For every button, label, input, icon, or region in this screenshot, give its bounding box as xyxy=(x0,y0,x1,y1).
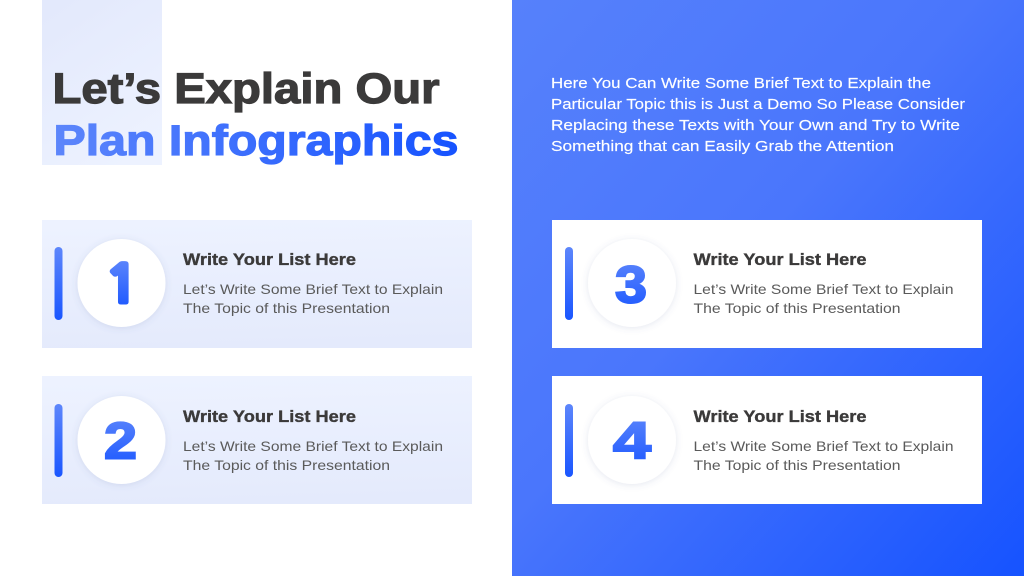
item 2 text: The Topic of this Presentation xyxy=(183,458,390,473)
number circle 1 xyxy=(78,239,166,327)
item 1 text: The Topic of this Presentation xyxy=(183,301,390,316)
panel: list item 4 xyxy=(552,376,982,504)
item 4 text xyxy=(694,439,954,473)
decorative title backdrop xyxy=(42,0,162,165)
number circle 2 xyxy=(78,396,166,484)
item 2 heading: Write Your List Here xyxy=(183,408,356,426)
item 3 text xyxy=(694,282,954,316)
accent bar 3 xyxy=(565,247,573,320)
accent bar 4 xyxy=(565,404,573,477)
number circle 2: 2 xyxy=(104,412,137,470)
item 1 text xyxy=(183,282,443,316)
item 3 text: Let’s Write Some Brief Text to Explain xyxy=(694,282,954,297)
intro paragraph: Here You Can Write Some Brief Text to Explain the xyxy=(551,76,931,92)
intro paragraph xyxy=(551,76,965,155)
item 2 text: Let’s Write Some Brief Text to Explain xyxy=(183,439,443,454)
number circle 4 xyxy=(588,396,676,484)
number circle 3 xyxy=(588,239,676,327)
intro paragraph: Replacing these Texts with Your Own and Try to Write xyxy=(551,118,960,134)
title xyxy=(52,66,458,165)
item 3 text: The Topic of this Presentation xyxy=(694,301,900,316)
panel: list item 3 xyxy=(552,220,982,348)
accent bar 1 xyxy=(54,247,62,320)
intro paragraph: Something that can Easily Grab the Attention xyxy=(551,139,894,155)
title: Let’s Explain Our xyxy=(52,66,440,113)
number circle 3: 3 xyxy=(615,256,647,314)
item 2 text xyxy=(183,439,443,473)
panel: list item 2 xyxy=(42,376,472,504)
item 4 text: The Topic of this Presentation xyxy=(694,458,900,473)
title: Plan Infographics xyxy=(54,118,458,165)
item 1 heading: Write Your List Here xyxy=(183,251,356,269)
intro paragraph: Particular Topic this is Just a Demo So Please Consider xyxy=(551,97,965,113)
number circle 4: 4 xyxy=(613,412,651,470)
item 4 text: Let’s Write Some Brief Text to Explain xyxy=(694,439,954,454)
accent bar 2 xyxy=(54,404,62,477)
item 3 heading: Write Your List Here xyxy=(694,251,866,269)
item 4 heading: Write Your List Here xyxy=(694,408,866,426)
panel: blue right background xyxy=(512,0,1024,576)
number circle 1: 1 xyxy=(104,258,140,310)
item 1 text: Let’s Write Some Brief Text to Explain xyxy=(183,282,443,297)
panel: list item 1 xyxy=(42,220,472,348)
